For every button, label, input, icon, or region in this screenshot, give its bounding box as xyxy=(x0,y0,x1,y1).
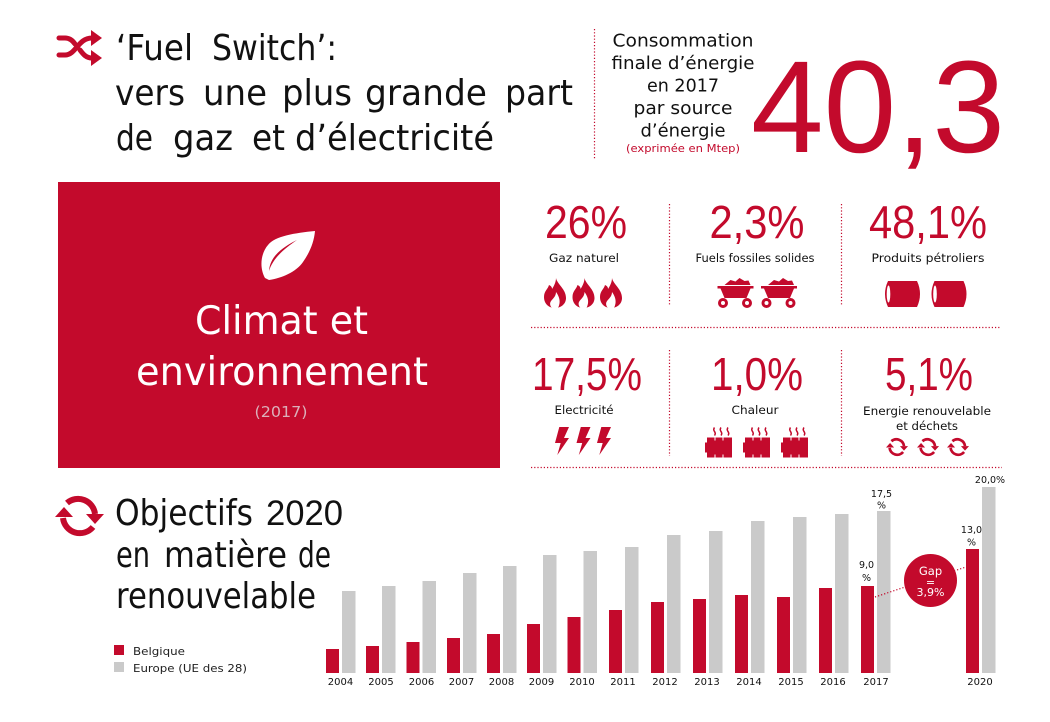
stat: gaz naturel: Gaz naturel xyxy=(549,251,619,265)
heading: objectifs 2020: 2020 xyxy=(266,493,343,533)
year labels: 2011 xyxy=(610,677,636,688)
description: final energy consumption: Consommation xyxy=(612,32,754,52)
value labels: 13,0 xyxy=(961,525,982,536)
title: fuel switch: Switch’: xyxy=(212,28,337,69)
year labels xyxy=(328,677,993,688)
legend: Belgique xyxy=(133,645,185,658)
callout: gap: = xyxy=(926,576,935,589)
stat: energie renouvelable: et déchets xyxy=(896,419,958,433)
heading: climat et environnement: Climat et xyxy=(195,299,368,344)
description: final energy consumption xyxy=(594,29,754,160)
stat: fuels fossiles solides: Fuels fossiles solides xyxy=(696,251,815,265)
icon: radiators xyxy=(705,428,808,458)
year labels: 2005 xyxy=(368,677,394,688)
icon: coal carts xyxy=(718,278,797,306)
icon: leaf xyxy=(261,231,315,280)
stat: produits petroliers xyxy=(869,196,987,307)
description: final energy consumption: d’énergie xyxy=(640,122,726,142)
title: fuel switch: ‘Fuel xyxy=(116,28,193,69)
bar chart: renewable share xyxy=(326,475,1005,688)
year labels: 2010 xyxy=(569,677,595,688)
icon: recycle xyxy=(886,439,969,455)
title: fuel switch: et xyxy=(252,118,285,159)
title: fuel switch: part xyxy=(505,73,573,114)
value labels: % xyxy=(862,573,871,584)
stat: energie renouvelable: 5,1% xyxy=(885,348,973,400)
stat: electricite xyxy=(532,348,642,455)
icon: barrels xyxy=(885,281,966,307)
stat: energie renouvelable: Energie renouvelable xyxy=(863,404,991,418)
stat grid dividers xyxy=(531,204,1002,468)
value labels: % xyxy=(877,500,886,512)
stat: electricite: Electricité xyxy=(554,403,614,417)
year labels: 2016 xyxy=(820,677,846,688)
description: final energy consumption: par source xyxy=(634,99,732,119)
value labels: 17,5 xyxy=(871,489,892,500)
value labels: 9,0 xyxy=(859,560,874,571)
stat: produits petroliers: 48,1% xyxy=(869,196,987,248)
heading: objectifs 2020 xyxy=(115,493,343,617)
value labels: % xyxy=(967,538,976,548)
title: fuel switch: vers xyxy=(115,73,185,114)
title: fuel switch: d’électricité xyxy=(295,118,494,159)
year labels: 2012 xyxy=(652,677,678,688)
legend: Europe (UE des 28) xyxy=(133,662,247,675)
stat: fuels fossiles solides xyxy=(696,196,815,306)
year labels: 2009 xyxy=(529,677,554,688)
stat: energie renouvelable xyxy=(863,348,991,455)
heading: objectifs 2020: de xyxy=(298,535,331,576)
big number 40,3: 40,3 xyxy=(751,33,1005,180)
stat: gaz naturel xyxy=(544,196,627,308)
callout: gap xyxy=(875,554,966,607)
callout: gap: Gap xyxy=(919,564,942,578)
heading: objectifs 2020: renouvelable xyxy=(116,576,316,617)
description: final energy consumption: en 2017 xyxy=(647,76,719,96)
description: final energy consumption: (exprimée en Mtep) xyxy=(626,143,740,155)
panel: climat et environnement xyxy=(58,182,500,468)
year labels: 2004 xyxy=(328,677,353,688)
value labels: 20,0% xyxy=(975,475,1005,486)
year labels: 2013 xyxy=(694,677,720,688)
legend xyxy=(114,645,247,675)
year: (2017) xyxy=(254,403,308,421)
icon: renewable cycle xyxy=(55,499,104,533)
callout: gap: 3,9% xyxy=(917,586,944,599)
title: fuel switch xyxy=(115,28,573,159)
stat: chaleur xyxy=(705,348,808,458)
title: fuel switch: grande xyxy=(365,73,487,114)
stat: produits petroliers: Produits pétroliers xyxy=(872,251,985,265)
year labels: 2014 xyxy=(736,677,762,688)
heading: climat et environnement xyxy=(136,299,428,395)
stat: electricite: 17,5% xyxy=(532,348,642,400)
title: fuel switch: une xyxy=(203,73,267,114)
icon: shuffle arrows xyxy=(59,30,102,66)
stat: chaleur: 1,0% xyxy=(711,348,803,400)
icon: lightning bolts xyxy=(555,427,611,455)
heading: climat et environnement: environnement xyxy=(136,350,428,395)
heading: objectifs 2020: matière xyxy=(164,535,287,576)
stat: gaz naturel: 26% xyxy=(545,196,627,248)
stat: fuels fossiles solides: 2,3% xyxy=(710,196,804,248)
heading: objectifs 2020: en xyxy=(116,535,150,576)
heading: objectifs 2020: Objectifs xyxy=(115,493,253,534)
title: fuel switch: de xyxy=(116,118,153,159)
year labels: 2020 xyxy=(967,677,993,688)
year labels: 2017 xyxy=(863,677,889,688)
title: fuel switch: gaz xyxy=(173,118,233,159)
value labels xyxy=(859,475,1005,584)
year labels: 2008 xyxy=(489,677,514,688)
year labels: 2006 xyxy=(409,677,434,688)
year labels: 2015 xyxy=(778,677,804,688)
year labels: 2007 xyxy=(449,677,474,688)
title: fuel switch: plus xyxy=(282,73,352,114)
description: final energy consumption: finale d’énergie xyxy=(612,54,754,74)
icon: flames xyxy=(544,278,622,308)
stat: chaleur: Chaleur xyxy=(732,403,779,417)
